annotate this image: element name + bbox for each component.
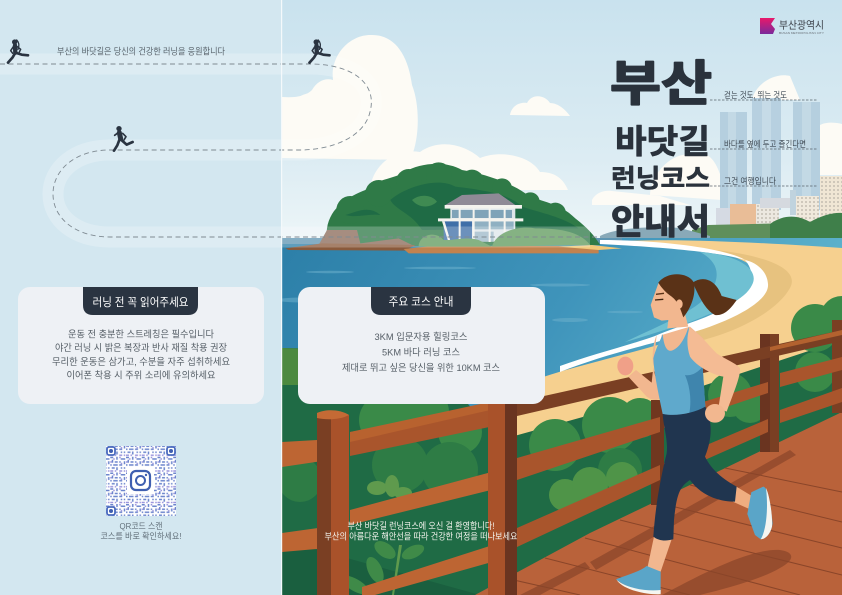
title side notes: 그건 여행입니다: [724, 176, 776, 186]
divider fold line: [281, 0, 282, 595]
boardwalk deck: [475, 412, 842, 595]
title: 바닷길: [615, 123, 710, 160]
logo: Busan Metropolitan City: [760, 18, 824, 35]
panel: pre-run notes: [18, 287, 264, 404]
QR caption: 코스를 바로 확인하세요!: [100, 531, 182, 541]
fence: front posts: [317, 400, 517, 595]
icon: runner silhouette 2: [309, 39, 329, 63]
ponytail: [693, 279, 737, 315]
sea: [282, 238, 842, 406]
panel: main courses: [298, 287, 545, 404]
translucent running path band: [0, 64, 590, 237]
notes text: 무리한 운동은 삼가고, 수분을 자주 섭취하세요: [52, 356, 230, 368]
notes text: 이어폰 착용 시 주위 소리에 유의하세요: [66, 370, 216, 382]
notes text: 운동 전 충분한 스트레칭은 필수입니다: [68, 328, 214, 340]
course list: 제대로 뛰고 싶은 당신을 위한 10KM 코스: [342, 362, 500, 374]
QR code: [106, 446, 176, 516]
icon: instagram: [127, 467, 154, 494]
front leg lower: [647, 537, 672, 572]
wet sand band: [696, 250, 792, 340]
pants: [653, 407, 737, 541]
notes text: 야간 러닝 시 밝은 복장과 반사 재질 착용 권장: [55, 342, 227, 354]
tank top: [653, 327, 705, 415]
water ripples: [278, 267, 643, 322]
heading tab: [83, 287, 198, 315]
front shoe: [616, 566, 661, 593]
title: [610, 58, 712, 242]
fence: back posts: [651, 320, 842, 505]
pavilion: [438, 193, 523, 242]
ear and eye: [676, 299, 683, 309]
panel: main courses: 주요 코스 안내: [388, 296, 454, 308]
icon: runner silhouette 3: [114, 126, 133, 151]
title: 부산: [610, 58, 712, 111]
QR caption: QR코드 스캔: [120, 521, 163, 531]
green hillside foreground: [278, 296, 842, 595]
title: 안내서: [611, 203, 710, 242]
title side notes: 바다를 옆에 두고 즐긴다면: [724, 139, 806, 149]
course list: [342, 331, 500, 374]
logo wordmark: 부산광역시: [779, 20, 824, 32]
hand fist: [617, 357, 633, 375]
finder squares: [107, 447, 175, 515]
icon: runner silhouette 1: [8, 39, 28, 63]
shoulder: [661, 326, 704, 351]
course list: 3KM 입문자용 힐링코스: [374, 331, 468, 343]
shallow water: [625, 252, 754, 342]
city skyline: [600, 98, 842, 250]
foam: [560, 260, 768, 372]
left tagline: 부산의 바닷길은 당신의 건강한 러닝을 응원합니다: [57, 46, 226, 56]
back arm: [628, 335, 662, 400]
hair: [658, 274, 694, 317]
QR caption: [100, 521, 182, 541]
welcome message: 부산의 아름다운 해안선을 따라 건강한 여정을 떠나보세요: [324, 530, 518, 542]
neck and face: [651, 283, 688, 328]
notes text: [52, 328, 230, 382]
panel: left cover background: [0, 0, 281, 595]
island: [285, 162, 622, 253]
foliage plant: [349, 475, 424, 595]
clouds: [282, 35, 842, 205]
logo mark: [760, 18, 775, 34]
fence: rails: [282, 330, 842, 595]
sky: [282, 0, 842, 245]
near arm: [687, 328, 740, 412]
logo subline: BUSAN METROPOLITAN CITY: [779, 31, 824, 35]
back shoe: [747, 487, 773, 539]
back leg lower: [732, 486, 751, 508]
title: 런닝코스: [611, 165, 710, 193]
sand beach: [517, 240, 842, 436]
title side notes: [710, 90, 818, 186]
welcome message: [324, 520, 518, 542]
title side notes: 걷는 것도, 뛰는 것도: [724, 90, 787, 100]
dashed running path: [0, 64, 600, 237]
welcome message: 부산 바닷길 런닝코스에 오신 걸 환영합니다!: [348, 520, 494, 531]
panel: right cover illustration: [278, 0, 842, 595]
heading tab: [371, 287, 471, 315]
runner illustration: [616, 274, 773, 594]
course list: 5KM 바다 러닝 코스: [382, 348, 460, 358]
panel: pre-run notes: 러닝 전 꼭 읽어주세요: [92, 296, 188, 309]
